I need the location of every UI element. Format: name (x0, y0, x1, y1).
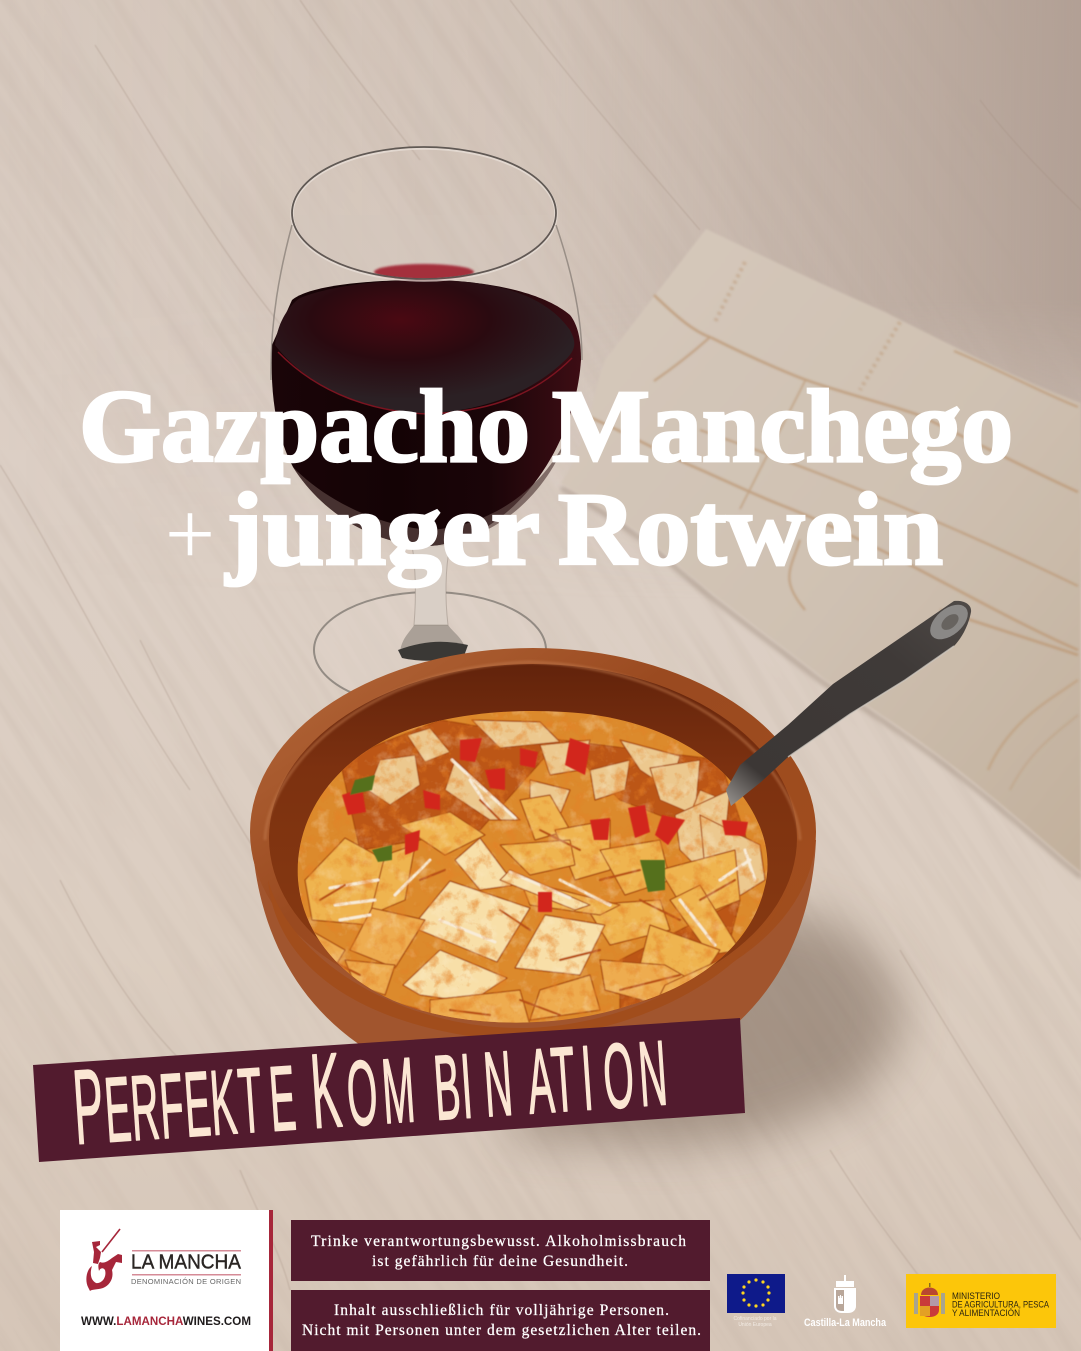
website: WWW.LAMANCHAWINES.COM (81, 1316, 251, 1328)
logo: European Union: Cofinanciado por la (733, 1316, 777, 1322)
logo: Ministerio de Agricultura: DE AGRICULTURA, PESCA (952, 1300, 1049, 1310)
logo: Ministerio de Agricultura (906, 1274, 1056, 1328)
glass rim (292, 148, 556, 280)
banner: Perfekte Kombination (33, 1009, 745, 1167)
title (79, 369, 1013, 587)
logo: European Union (727, 1274, 785, 1328)
banner: Perfekte Kombination: OMBINATION (344, 1021, 670, 1145)
wine glass (271, 147, 582, 708)
glass stem (412, 545, 450, 625)
logo: Castilla-La Mancha (804, 1275, 887, 1329)
title word: Rotwein: Rotwein (558, 472, 943, 587)
title word: Gazpacho: Gazpacho (79, 369, 530, 484)
footer panel: La Mancha logo (60, 1210, 273, 1351)
notice: responsible drinking (291, 1220, 710, 1281)
red wine (272, 280, 581, 546)
notice: adults only (291, 1290, 710, 1351)
wine seen through rim (374, 264, 474, 280)
banner: Perfekte Kombination: ERFEKTE (101, 1046, 299, 1161)
notice: adults only: Inhalt ausschließlich für volljährige Personen. (334, 1302, 669, 1319)
gazpacho food (298, 711, 768, 1023)
title word: junger: junger (225, 472, 540, 587)
logo: European Union: Unión Europea (738, 1322, 772, 1328)
logo subtitle: DENOMINACIÓN DE ORIGEN (131, 1277, 241, 1286)
spoon (726, 598, 974, 806)
notice: responsible drinking: ist gefährlich für deine Gesundheit. (372, 1253, 628, 1270)
glass bowl (271, 215, 582, 548)
logo wordmark: LA MANCHA (131, 1250, 241, 1274)
logo: Ministerio de Agricultura: Y ALIMENTACIÓN (952, 1308, 1020, 1318)
title plus sign: + (165, 485, 215, 584)
title word: Manchego: Manchego (552, 369, 1013, 484)
bowl inner (269, 664, 797, 1012)
glass foot (314, 592, 546, 708)
banner: Perfekte Kombination: P (70, 1047, 107, 1167)
bowl shadow (500, 911, 902, 1145)
banner: Perfekte Kombination: K (307, 1031, 345, 1151)
notice: adults only: Nicht mit Personen unter dem gesetzlichen Alter teilen. (302, 1322, 701, 1339)
icon: Spanish coat of arms (914, 1283, 945, 1317)
bowl rim (250, 648, 816, 1016)
napkin with plaid stripes (561, 229, 1081, 877)
logo: Ministerio de Agricultura: MINISTERIO (952, 1291, 1000, 1301)
bowl outer body (252, 840, 816, 1045)
terracotta bowl with gazpacho (250, 648, 816, 1045)
wine surface (275, 280, 574, 413)
logo: Castilla-La Mancha: Castilla-La Mancha (804, 1317, 887, 1329)
icon: rider on horse (86, 1229, 122, 1291)
notice: responsible drinking: Trinke verantwortungsbewusst. Alkoholmissbrauch (311, 1233, 686, 1250)
